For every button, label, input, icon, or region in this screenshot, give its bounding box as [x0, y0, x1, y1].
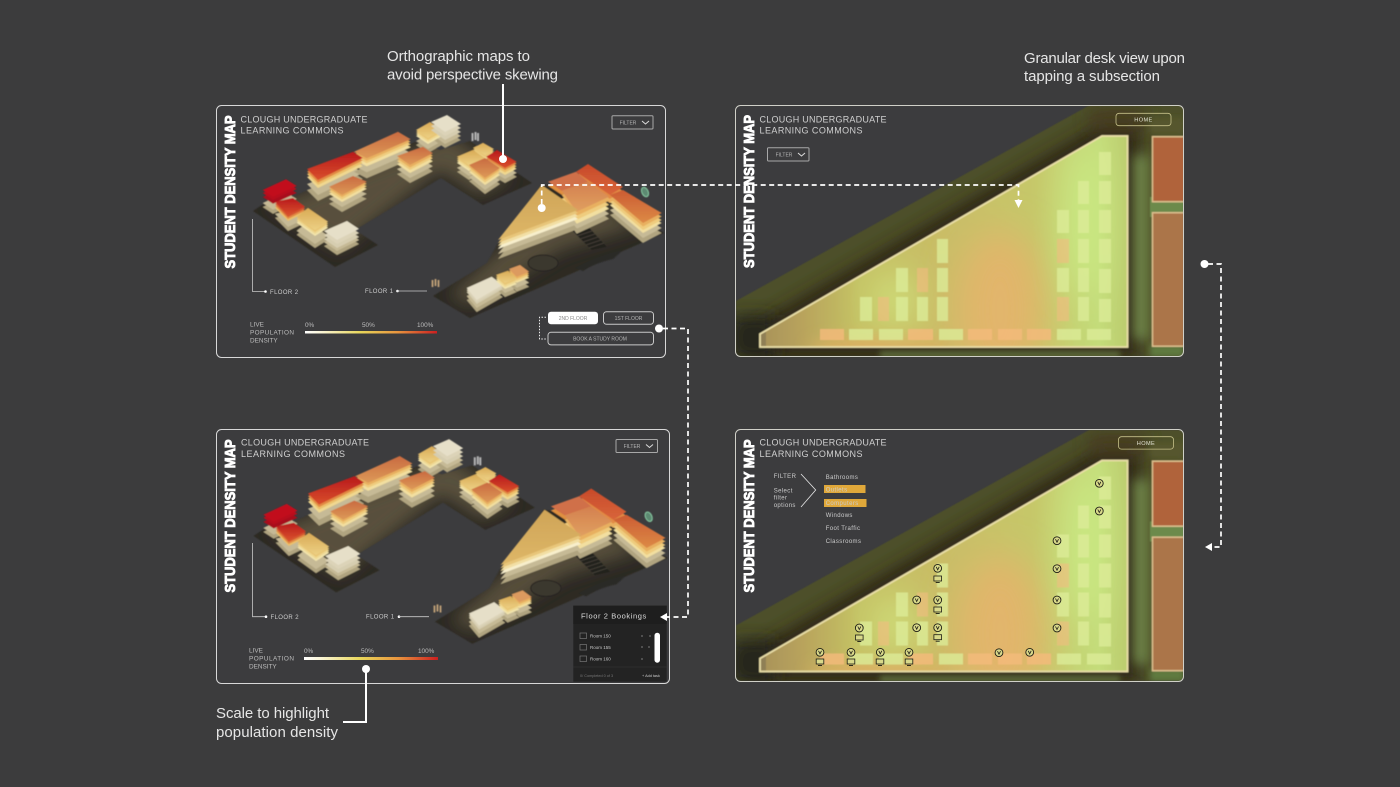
panel: overview map with bookings [216, 430, 670, 684]
density legend: DENSITY [250, 338, 278, 344]
floor buttons: 2ND FLOOR [559, 316, 588, 322]
floor buttons: 1ST FLOOR [615, 316, 643, 322]
filter menu: FILTER [774, 474, 797, 480]
home button: HOME [1134, 118, 1153, 124]
bookings panel: Room 150 [590, 634, 611, 638]
density legend: DENSITY [249, 664, 277, 670]
filter menu: Windows [826, 513, 853, 519]
home button [1118, 437, 1174, 449]
building name: LEARNING COMMONS [240, 126, 344, 136]
density legend: 0% [304, 648, 314, 655]
density legend [250, 322, 437, 344]
filter menu [774, 474, 866, 545]
floor plan [730, 105, 1184, 390]
floor 2 label: FLOOR 2 [270, 290, 299, 296]
vertical heading: STUDENT DENSITY MAP [223, 115, 239, 268]
panel: desk view [730, 105, 1184, 390]
floor 1 label [366, 614, 429, 620]
floor 2 label: FLOOR 2 [270, 615, 299, 621]
filter menu: Classrooms [826, 539, 861, 545]
filter menu: Select [774, 489, 793, 495]
density legend: POPULATION [250, 330, 294, 336]
annotation: orthographic maps [387, 48, 558, 163]
annotation: scale [216, 665, 370, 741]
building name: CLOUGH UNDERGRADUATE [241, 438, 369, 448]
building name [241, 438, 369, 459]
outlet icons [816, 479, 1103, 657]
building name: CLOUGH UNDERGRADUATE [760, 114, 886, 124]
filter button [768, 148, 809, 161]
floor 1 label: FLOOR 1 [365, 289, 394, 295]
vertical heading: STUDENT DENSITY MAP [742, 439, 758, 592]
annotation: granular desk view: tapping a subsection [1024, 68, 1160, 85]
density legend: 50% [361, 648, 374, 655]
floor buttons [540, 312, 654, 345]
density legend: 50% [362, 322, 375, 329]
isometric building map [253, 115, 664, 318]
density legend: LIVE [250, 322, 264, 328]
annotation: scale: Scale to highlight [216, 705, 330, 722]
floor 1 label: FLOOR 1 [366, 614, 395, 620]
filter menu: Outlets [826, 488, 848, 494]
building name: CLOUGH UNDERGRADUATE [240, 114, 368, 124]
filter button: FILTER [620, 120, 637, 126]
building name [760, 438, 886, 459]
home button [1116, 113, 1171, 126]
filter menu: Bathrooms [826, 475, 858, 481]
vertical heading: STUDENT DENSITY MAP [742, 115, 758, 268]
arrow: book button to bookings panel [655, 324, 688, 621]
density legend: LIVE [249, 648, 263, 654]
bookings panel: 0/ Completed 0 of 3 [580, 674, 613, 678]
density legend: 100% [418, 648, 435, 655]
floor 2 label [252, 543, 299, 621]
building name [760, 114, 886, 136]
annotation: scale: population density [216, 724, 338, 741]
density legend [249, 648, 438, 670]
floor 1 label [365, 289, 427, 295]
building name: LEARNING COMMONS [760, 126, 862, 136]
bookings panel: Room 155 [590, 645, 611, 650]
filter menu: filter [774, 496, 787, 502]
building name: LEARNING COMMONS [241, 449, 345, 459]
bookings panel: Floor 2 Bookings [581, 612, 647, 620]
density legend: 0% [305, 322, 315, 329]
computer icons [816, 576, 942, 666]
floor buttons: BOOK A STUDY ROOM [573, 336, 627, 342]
isometric building map [254, 439, 668, 644]
filter button [612, 116, 653, 129]
filter menu: Computers [826, 501, 859, 507]
floor 2 label [252, 219, 299, 296]
density legend: 100% [417, 322, 434, 329]
filter button: FILTER [776, 152, 793, 158]
filter menu: options [774, 503, 796, 509]
building name: CLOUGH UNDERGRADUATE [760, 438, 886, 448]
vertical heading: STUDENT DENSITY MAP [223, 439, 239, 592]
annotation: orthographic maps: Orthographic maps to [387, 48, 530, 65]
bookings panel: Room 160 [590, 656, 611, 662]
annotation: granular desk view [1024, 50, 1185, 85]
filter button: FILTER [624, 444, 641, 450]
arrow: desk view to filtered view [1200, 260, 1221, 551]
annotation: orthographic maps: avoid perspective skewing [387, 66, 558, 84]
bookings panel [573, 606, 667, 682]
arrow: triangle to desk view [538, 185, 1022, 212]
floor plan [730, 430, 1184, 714]
filter menu: Foot Traffic [826, 526, 860, 532]
annotation: granular desk view: Granular desk view upon [1024, 50, 1185, 67]
home button: HOME [1137, 441, 1155, 447]
panel: overview map top left [216, 106, 666, 358]
building name [240, 114, 368, 136]
bookings panel: + Add task [642, 674, 660, 678]
building name: LEARNING COMMONS [760, 449, 862, 459]
panel: desk view with filters [730, 430, 1184, 714]
density legend: POPULATION [249, 656, 294, 662]
filter button [616, 440, 658, 452]
